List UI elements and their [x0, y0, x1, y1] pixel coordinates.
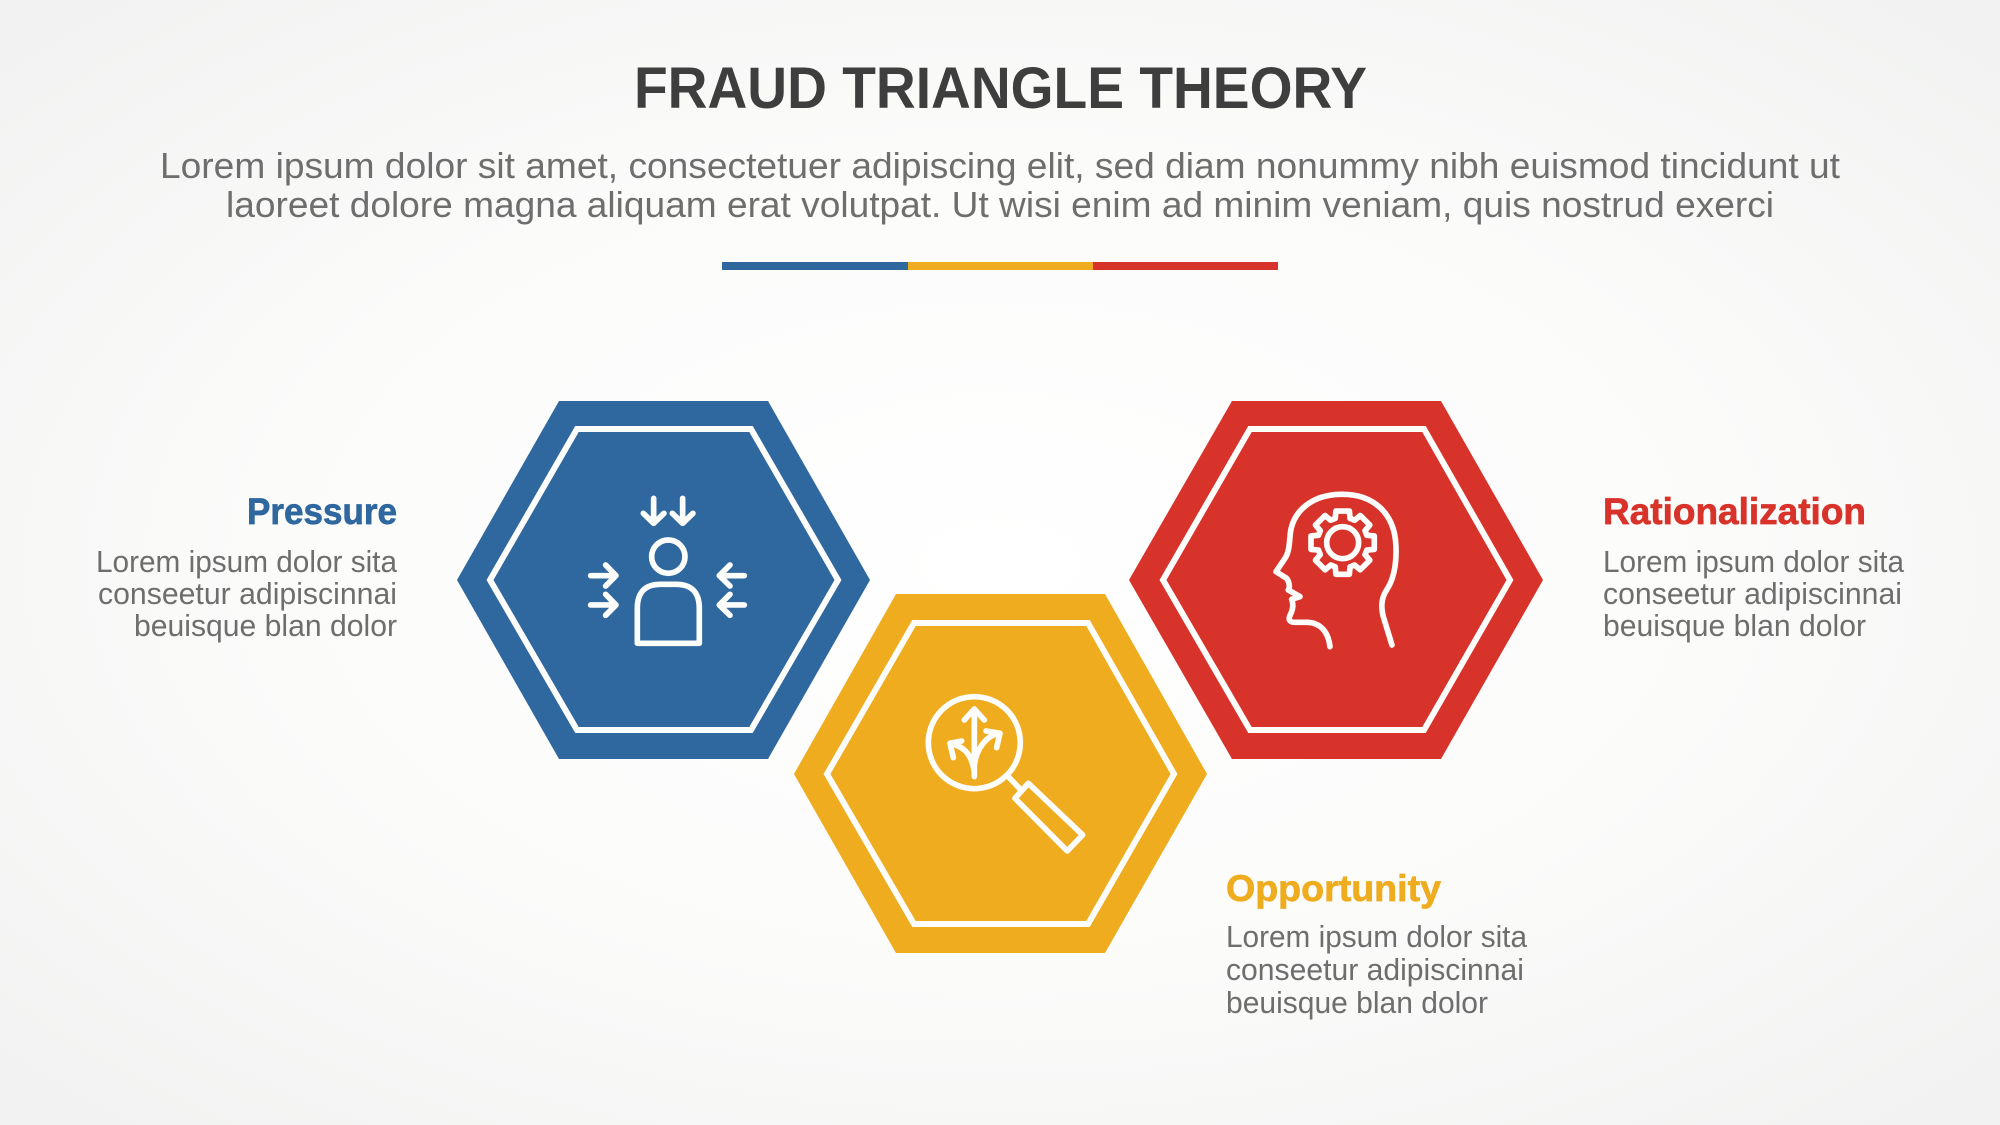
icon: head with gear — [1276, 494, 1396, 647]
panel: pressure hexagon — [457, 401, 870, 759]
subtitle text block: Lorem ipsum dolor sit amet, consectetuer adipiscing elit, sed diam nonummy nibh euismod tincidunt ut — [160, 145, 1840, 186]
text block: rationalization: Lorem ipsum dolor sita — [1603, 544, 1905, 579]
panel: rationalization hexagon — [1129, 401, 1543, 759]
subtitle text block — [160, 145, 1840, 225]
text block: rationalization: Rationalization — [1603, 491, 1866, 532]
text block: rationalization: beuisque blan dolor — [1603, 608, 1866, 643]
text block: pressure: Lorem ipsum dolor sita — [96, 544, 398, 579]
text block: opportunity: Lorem ipsum dolor sita — [1226, 919, 1528, 954]
text block: pressure — [96, 491, 398, 643]
text block: pressure: beuisque blan dolor — [134, 608, 397, 643]
text block: opportunity — [1226, 868, 1528, 1020]
text block: opportunity: conseetur adipiscinnai — [1226, 952, 1524, 987]
tricolor divider — [722, 262, 1278, 270]
panel: opportunity hexagon — [794, 594, 1207, 953]
text block: opportunity: beuisque blan dolor — [1226, 985, 1488, 1020]
text block: opportunity: Opportunity — [1226, 868, 1441, 909]
subtitle text block: laoreet dolore magna aliquam erat volutpat. Ut wisi enim ad minim veniam, quis nostrud exerci — [226, 184, 1774, 225]
text block: pressure: conseetur adipiscinnai — [98, 576, 397, 611]
text block: pressure: Pressure — [247, 491, 397, 532]
icon: magnifier over branching arrows — [928, 697, 1083, 851]
title: FRAUD TRIANGLE THEORY — [634, 56, 1367, 121]
icon: person under pressure with arrows — [591, 498, 744, 643]
text block: rationalization: conseetur adipiscinnai — [1603, 576, 1902, 611]
text block: rationalization — [1603, 491, 1905, 643]
